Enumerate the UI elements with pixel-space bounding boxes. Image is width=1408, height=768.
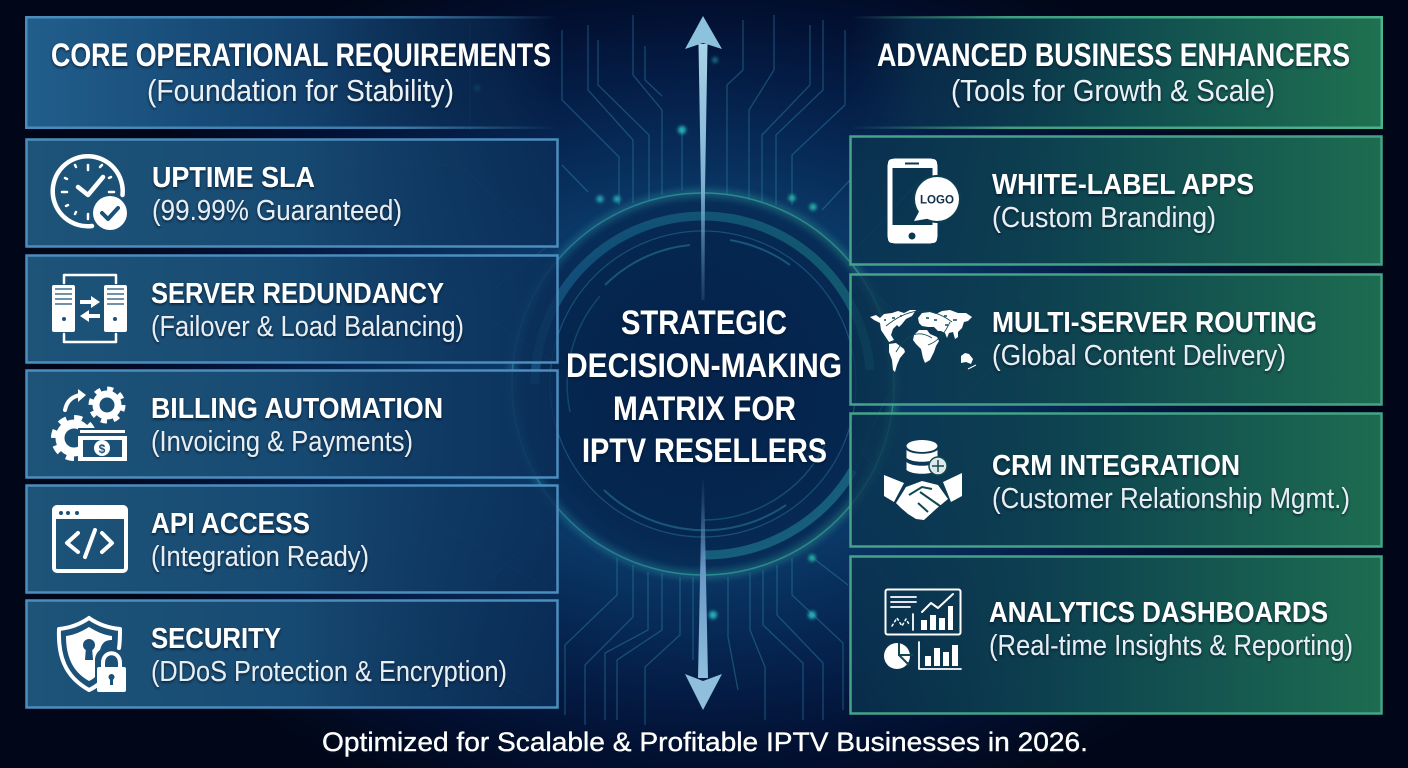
- left column: core operational requirements: [25, 16, 558, 708]
- panel: white-label apps: (Custom Branding): [992, 202, 1216, 234]
- icon: world map: [870, 310, 976, 372]
- panel: uptime SLA: (99.99% Guaranteed): [152, 195, 402, 227]
- center title: [566, 304, 842, 470]
- panel: multi-server routing: (Global Content Delivery): [992, 340, 1286, 372]
- right column: advanced business enhancers: [850, 16, 1383, 714]
- icon: phone with logo bubble: [888, 159, 961, 243]
- panel: security: (DDoS Protection & Encryption): [151, 656, 507, 688]
- center title: STRATEGIC: [621, 304, 787, 342]
- icon: gears and banknote: $: [99, 442, 106, 456]
- arrow: vertical down: [685, 480, 722, 710]
- panel: uptime SLA: UPTIME SLA: [152, 162, 315, 194]
- panel: billing automation: [26, 370, 558, 478]
- panel: core header: [25, 16, 558, 129]
- panel: uptime SLA: [26, 140, 558, 246]
- panel: analytics dashboards: [850, 556, 1382, 714]
- panel: multi-server routing: MULTI-SERVER ROUTING: [992, 307, 1317, 339]
- panel: analytics dashboards: (Real-time Insights & Reporting): [989, 630, 1353, 662]
- center title: IPTV RESELLERS: [582, 432, 827, 470]
- icon: clock with check: [53, 156, 127, 230]
- panel: billing automation: (Invoicing & Payments): [151, 426, 413, 458]
- arrow: vertical up: [685, 16, 722, 300]
- icon: database and handshake: [884, 440, 962, 520]
- panel: core header: (Foundation for Stability): [147, 73, 454, 108]
- icon: phone with logo bubble: LOGO: [920, 192, 954, 206]
- panel: white-label apps: WHITE-LABEL APPS: [992, 169, 1254, 201]
- icon: analytics charts: [884, 590, 961, 669]
- panel: security: SECURITY: [151, 623, 281, 655]
- panel: CRM integration: CRM INTEGRATION: [992, 450, 1240, 482]
- panel: server redundancy: (Failover & Load Balancing): [151, 311, 464, 343]
- panel: billing automation: BILLING AUTOMATION: [151, 393, 443, 425]
- center title: MATRIX FOR: [613, 390, 796, 428]
- central circular hub: [512, 193, 894, 575]
- panel: API access: (Integration Ready): [151, 541, 369, 573]
- icon: redundant servers: [52, 275, 127, 342]
- panel: advanced header: [850, 16, 1383, 129]
- panel: CRM integration: [850, 414, 1382, 546]
- center title: DECISION-MAKING: [566, 347, 842, 385]
- icon: gears and banknote: [54, 389, 127, 462]
- panel: server redundancy: SERVER REDUNDANCY: [151, 278, 444, 310]
- panel: advanced header: (Tools for Growth & Scale): [951, 73, 1275, 108]
- panel: security: [26, 600, 558, 708]
- panel: API access: API ACCESS: [151, 508, 310, 540]
- panel: analytics dashboards: ANALYTICS DASHBOARDS: [989, 597, 1328, 629]
- panel: core header: CORE OPERATIONAL REQUIREMENTS: [51, 37, 551, 73]
- panel: white-label apps: [850, 136, 1382, 264]
- panel: CRM integration: (Customer Relationship Mgmt.): [992, 483, 1350, 515]
- icon: shield and lock: [59, 618, 126, 692]
- panel: multi-server routing: [850, 274, 1382, 404]
- panel: server redundancy: [26, 256, 558, 362]
- footer tagline: Optimized for Scalable & Profitable IPTV Businesses in 2026.: [322, 727, 1088, 757]
- icon: code window: [54, 507, 126, 571]
- panel: API access: [26, 486, 558, 592]
